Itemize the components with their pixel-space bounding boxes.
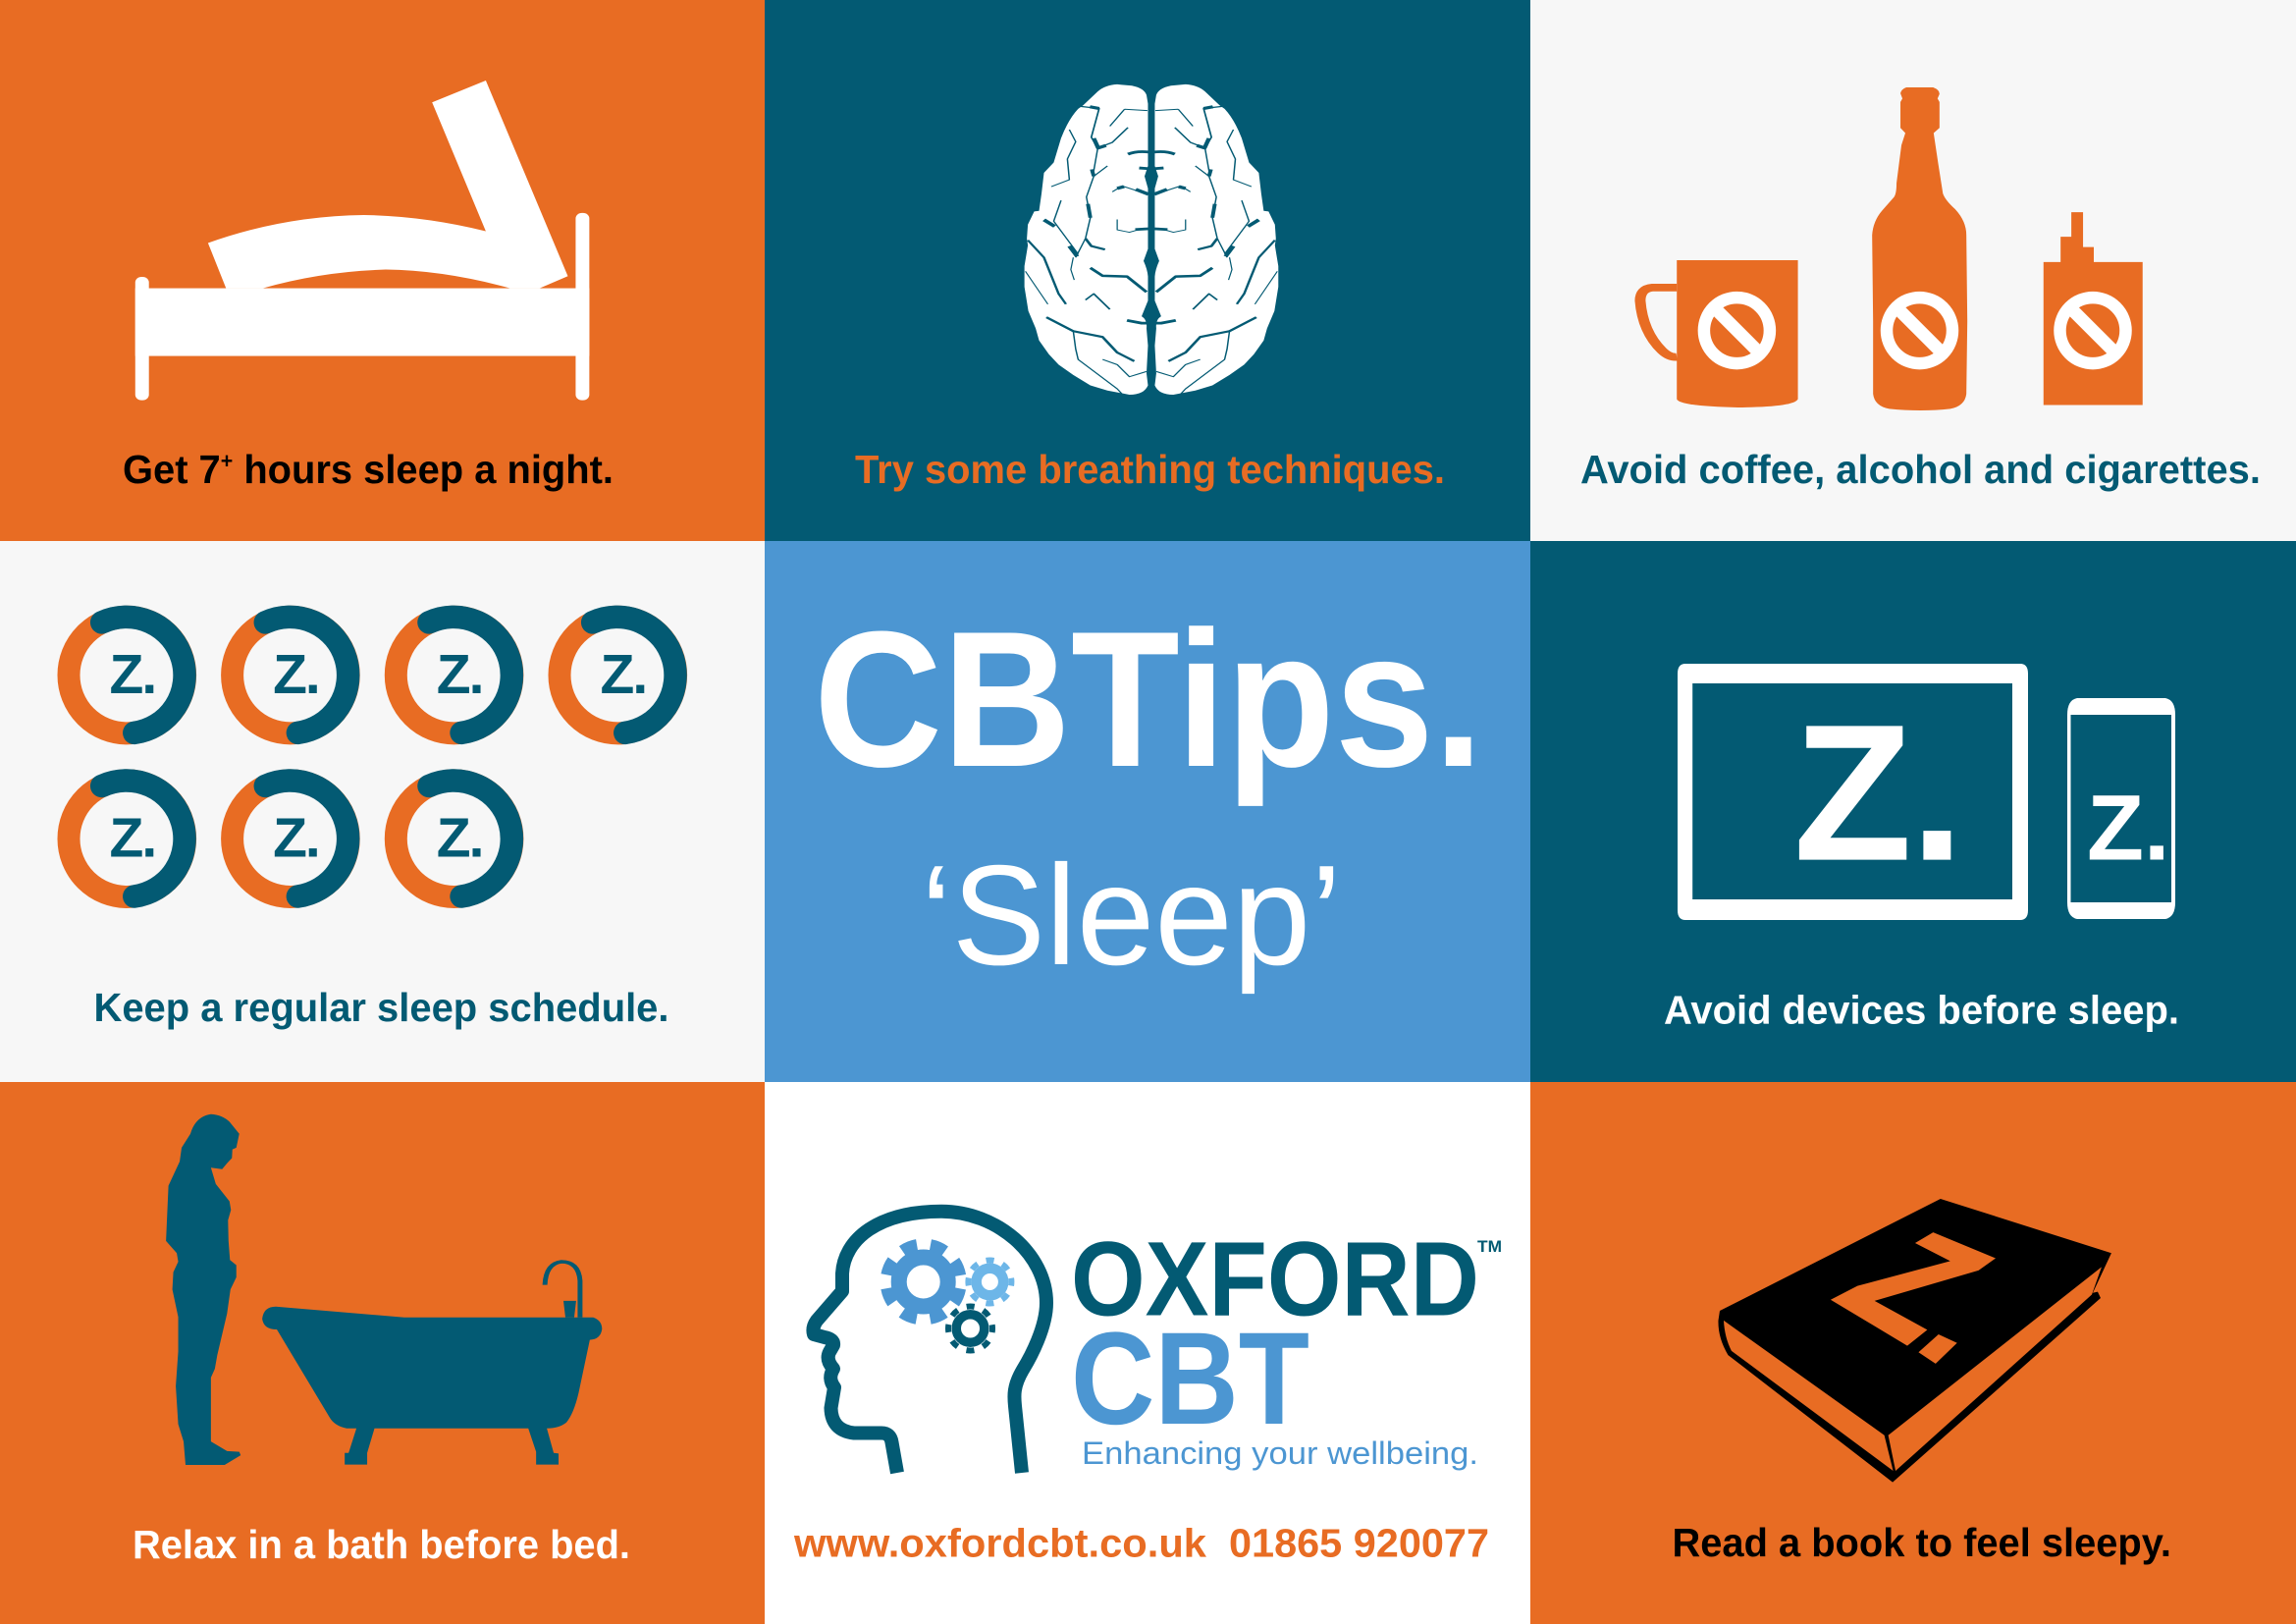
icon: book <box>1718 1199 2111 1483</box>
panel: breathing techniques <box>765 0 1530 541</box>
panel: avoid devices <box>1530 541 2296 1082</box>
panel: title <box>765 541 1530 1082</box>
title: CBTips.: CBTips. <box>814 591 1483 807</box>
logo: head with gears <box>813 1212 1046 1473</box>
icon: large gear <box>886 1245 961 1320</box>
icon: medium gear <box>968 1261 1011 1304</box>
logo: trademark: TM <box>1477 1237 1502 1256</box>
subtitle: Sleep: ‘Sleep’ <box>921 836 1342 995</box>
icon: tablet: Z. <box>1793 684 1962 901</box>
contact details: 01865 920077 <box>1229 1520 1489 1565</box>
icon: bath <box>262 1262 602 1465</box>
caption: get 7+ hours: Get 7 <box>123 447 224 492</box>
ring 7: Z. <box>437 807 482 870</box>
ring 6: Z. <box>273 807 319 870</box>
ring 3: Z. <box>437 643 482 706</box>
ring 5 <box>69 781 186 897</box>
icon: brain <box>1025 84 1278 395</box>
ring 5: Z. <box>110 807 155 870</box>
panel: regular sleep schedule <box>0 541 765 1082</box>
ring 4 <box>560 617 676 733</box>
icon: woman silhouette <box>166 1114 240 1465</box>
caption: avoid devices: Avoid devices before sleep. <box>1664 988 2179 1033</box>
ring 2: Z. <box>273 643 319 706</box>
logo: CBT wordmark: CBT <box>1071 1306 1309 1452</box>
caption: breathing techniques: Try some breathing techniques. <box>855 447 1445 492</box>
ring 7 <box>396 781 512 897</box>
caption: relax in a bath: Relax in a bath before bed. <box>133 1522 630 1567</box>
panel: relax in a bath <box>0 1082 765 1624</box>
icon group: seven sleep rings <box>69 617 676 897</box>
ring 1 <box>69 617 186 733</box>
caption: get 7+ hours: hours sleep a night. <box>233 447 614 492</box>
panel: logo and contact <box>765 1082 1530 1624</box>
caption: avoid coffee: Avoid coffee, alcohol and cigarettes. <box>1580 447 2261 492</box>
panel: avoid coffee alcohol cigarettes <box>1530 0 2296 541</box>
logo: tagline: Enhancing your wellbeing. <box>1082 1435 1478 1471</box>
ring 4: Z. <box>601 643 646 706</box>
icon: cigarettes <box>2044 212 2143 406</box>
caption: read a book: Read a book to feel sleepy. <box>1673 1520 2171 1565</box>
ring 3 <box>396 617 512 733</box>
panel: get 7+ hours sleep <box>0 0 765 541</box>
panel: read a book <box>1530 1082 2296 1624</box>
icon: bed <box>135 81 589 401</box>
caption: get 7+ hours: + <box>221 449 233 473</box>
ring 2 <box>233 617 348 733</box>
icon: coffee mug <box>1640 260 1798 407</box>
icon: tablet <box>1678 664 2028 920</box>
ring 1: Z. <box>110 643 155 706</box>
contact details <box>793 1520 1489 1565</box>
icon: phone: Z. <box>2087 777 2169 881</box>
contact details: www.oxfordcbt.co.uk <box>793 1520 1206 1565</box>
caption: regular schedule: Keep a regular sleep schedule. <box>94 985 669 1030</box>
icon: small gear <box>948 1306 992 1351</box>
icon: bottle <box>1872 87 1967 410</box>
icon: phone <box>2067 698 2175 919</box>
logo: OXFORD wordmark: OXFORD <box>1071 1219 1479 1338</box>
ring 6 <box>233 781 348 897</box>
